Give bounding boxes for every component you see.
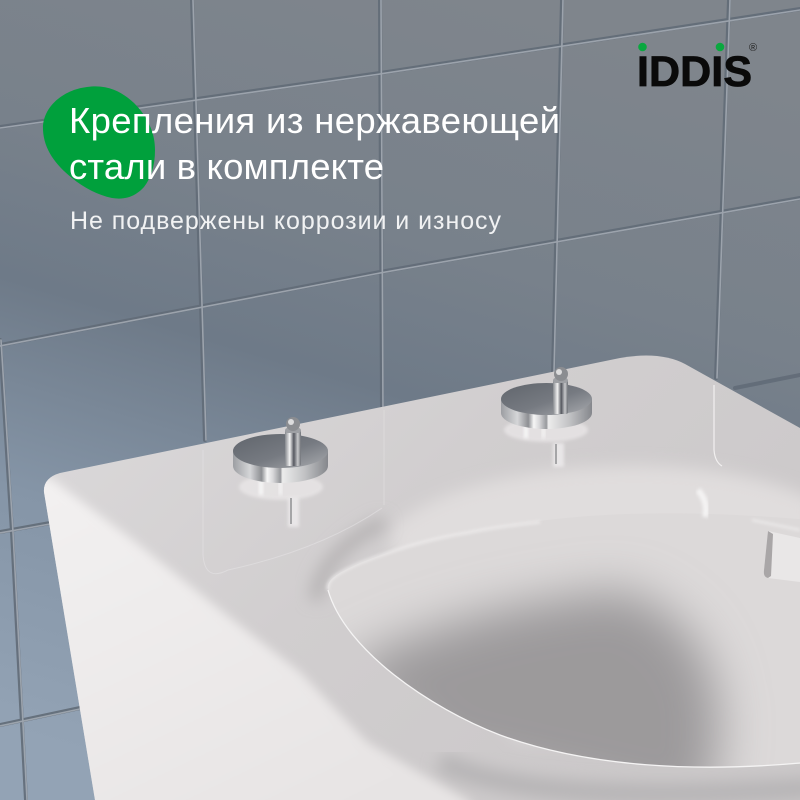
shaded band below the bowl [440,762,800,794]
heading line 2: стали в комплекте [69,146,384,187]
fitting: left [233,417,328,527]
subheading: Не подвержены коррозии и износу [70,207,502,235]
heading: Крепления из нержавеющей [69,100,560,141]
fitting: right [501,367,592,467]
rim highlight [698,490,706,517]
green blob accent [43,86,155,199]
logo: IDDIS: ® [749,42,757,54]
reflection on the surface [203,450,382,574]
front face [30,470,480,800]
bowl interior [328,556,800,766]
light rim region behind the bowl [392,465,800,548]
water outlet [752,520,800,582]
logo: IDDIS: IDDIS [637,48,752,96]
toilet bowl body [30,356,800,800]
shadow beside the bowl [316,522,385,600]
